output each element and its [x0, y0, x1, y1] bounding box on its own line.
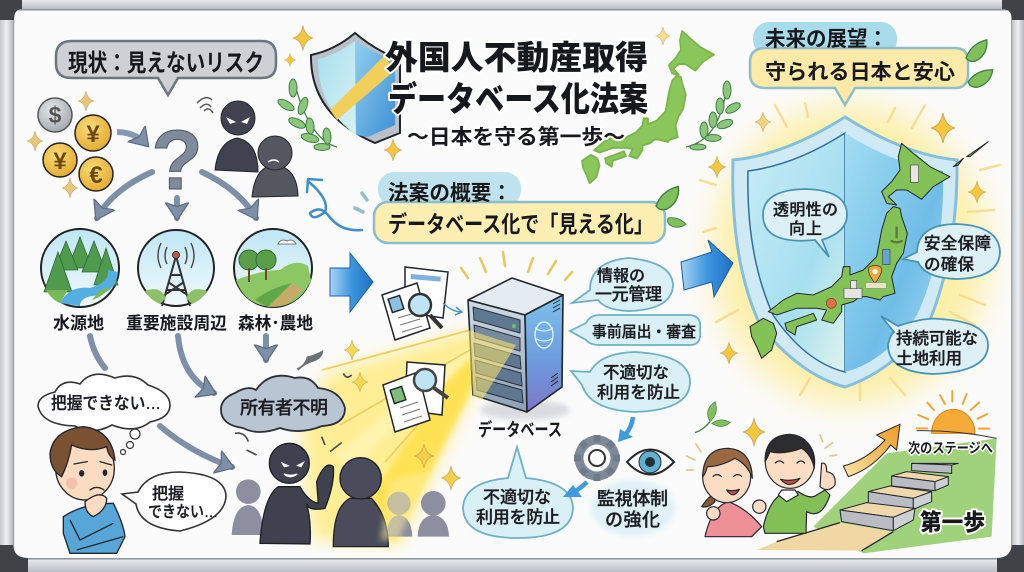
bubble: transparency: 透明性の: [773, 201, 838, 219]
cloud: unknown owner: 所有者不明: [240, 398, 328, 418]
bubble: security: の確保: [924, 255, 974, 274]
documents with magnifier 2: [383, 362, 448, 432]
header: bill overview: 法案の概要：: [388, 182, 512, 205]
shadow group of figures: [232, 350, 449, 547]
laurel left of title: [276, 79, 337, 150]
bubble: prevent misuse 1: [571, 352, 690, 412]
icon: coins: ¥: [86, 121, 100, 148]
header: bill overview: [374, 172, 686, 243]
big blue arrow 1: [330, 253, 373, 312]
bubble: sustainable land use: [881, 316, 988, 374]
bubble: sustainable land use: 土地利用: [896, 349, 962, 368]
bubble: security: 安全保障: [924, 234, 991, 253]
woman: [702, 448, 766, 537]
title: 〜日本を守る第一歩〜: [407, 126, 625, 149]
header: future outlook: 守られる日本と安心: [765, 61, 955, 84]
title: データベース化法案: [388, 80, 648, 119]
icon: farmland and trees: [234, 229, 312, 307]
path: [757, 523, 893, 551]
arrow: blue to bubble: [563, 482, 587, 497]
bubble: transparency: [763, 189, 847, 257]
orange arrow: [843, 424, 900, 477]
bubble: transparency: 向上: [789, 220, 822, 238]
text: stronger monitoring: 監視体制: [597, 489, 668, 509]
stairs: [840, 463, 958, 531]
sun: [917, 391, 997, 438]
bubble: security: [903, 224, 1000, 279]
bubble: sustainable land use: 持続可能な: [896, 329, 978, 348]
icon: coins: €: [89, 162, 103, 189]
bubble: prevent misuse 2: 利用を防止: [476, 508, 560, 527]
header: future outlook: 未来の展望：: [765, 28, 888, 51]
speech bubble: cannot grasp: できない…: [148, 503, 218, 521]
icon: gear: [574, 435, 620, 481]
label: to the next stage: 次のステージへ: [908, 440, 993, 456]
laurel right of map: [686, 81, 742, 150]
icon: eye: [627, 450, 674, 474]
rays around the future shield: [700, 103, 1000, 400]
arrow: curly blue: [307, 179, 367, 230]
title: 外国人不動産取得: [385, 39, 648, 76]
cartoon: worried man: [50, 427, 125, 553]
yellow overlay on the lower figures: [380, 470, 430, 540]
bubble: prior notification and review: [570, 315, 700, 345]
thought cloud: cannot grasp: 把握できない…: [51, 394, 161, 413]
bubble: central information management: 一元管理: [595, 285, 662, 304]
hill: [813, 438, 997, 553]
bubble: central information management: 情報の: [597, 267, 645, 285]
icon: green Japan map, top: [582, 31, 714, 183]
man: [763, 434, 835, 533]
server: database: [468, 278, 570, 420]
arrow: blue to gear: [618, 417, 633, 442]
icon: forest and river: [41, 229, 119, 307]
documents with magnifier 1: [382, 267, 462, 340]
text: stronger monitoring: [591, 480, 675, 536]
icon: shadow figures: [197, 98, 298, 197]
header: current state: 現状：見えないリスク: [68, 50, 264, 77]
arrow: coins to question mark: [117, 132, 147, 145]
header: current state: [56, 41, 276, 95]
title: [385, 39, 648, 149]
header: bill overview: データベース化で「見える化」: [388, 211, 653, 237]
light beam from the database: [300, 330, 495, 545]
big blue arrow 2: [681, 240, 733, 297]
labels for land types: [53, 314, 313, 333]
bubble: prior notification and review: 事前届出・審査: [592, 323, 696, 341]
arrows toward unknown owners: [90, 336, 266, 467]
label: first step: 第一歩: [920, 509, 985, 535]
leaf: [695, 402, 730, 433]
scene: next stage and couple: [687, 391, 997, 553]
bubble: prevent misuse 2: [463, 447, 573, 538]
labels for land types: 重要施設周辺: [126, 314, 227, 333]
shield icon near title: [311, 33, 400, 143]
icon: coins: $: [49, 102, 62, 128]
bubble: prevent misuse 2: 不適切な: [483, 488, 551, 507]
bubble: central information management: [572, 258, 673, 311]
cloud: unknown owner: [221, 376, 345, 432]
text: stronger monitoring: の強化: [605, 510, 660, 530]
beam overlay on server front: [468, 330, 516, 400]
sparkles around coins and title: [27, 26, 986, 490]
icon: coins: [38, 98, 113, 191]
rays above the server: [461, 252, 572, 280]
speech bubble: cannot grasp: [122, 472, 226, 531]
big protective shield: [733, 117, 957, 387]
bubble: prevent misuse 1: 利用を防止: [597, 383, 680, 402]
label: database: データベース: [478, 419, 562, 440]
icon: big Japan map: [750, 142, 988, 358]
header: future outlook: [750, 22, 993, 105]
labels for land types: 森林･農地: [238, 314, 313, 333]
thought cloud: cannot grasp: [38, 374, 170, 454]
cheer marks: [687, 435, 837, 470]
icon: radio tower: [138, 230, 214, 306]
icon: question mark: ?: [151, 113, 203, 207]
labels for land types: 水源地: [53, 314, 104, 333]
speech bubble: cannot grasp: 把握: [152, 485, 184, 503]
icon: coins: ¥: [53, 148, 67, 175]
bubble: prevent misuse 1: 不適切な: [603, 363, 669, 382]
arrows from the question mark: [97, 172, 256, 218]
glow: future shield: [712, 105, 988, 405]
